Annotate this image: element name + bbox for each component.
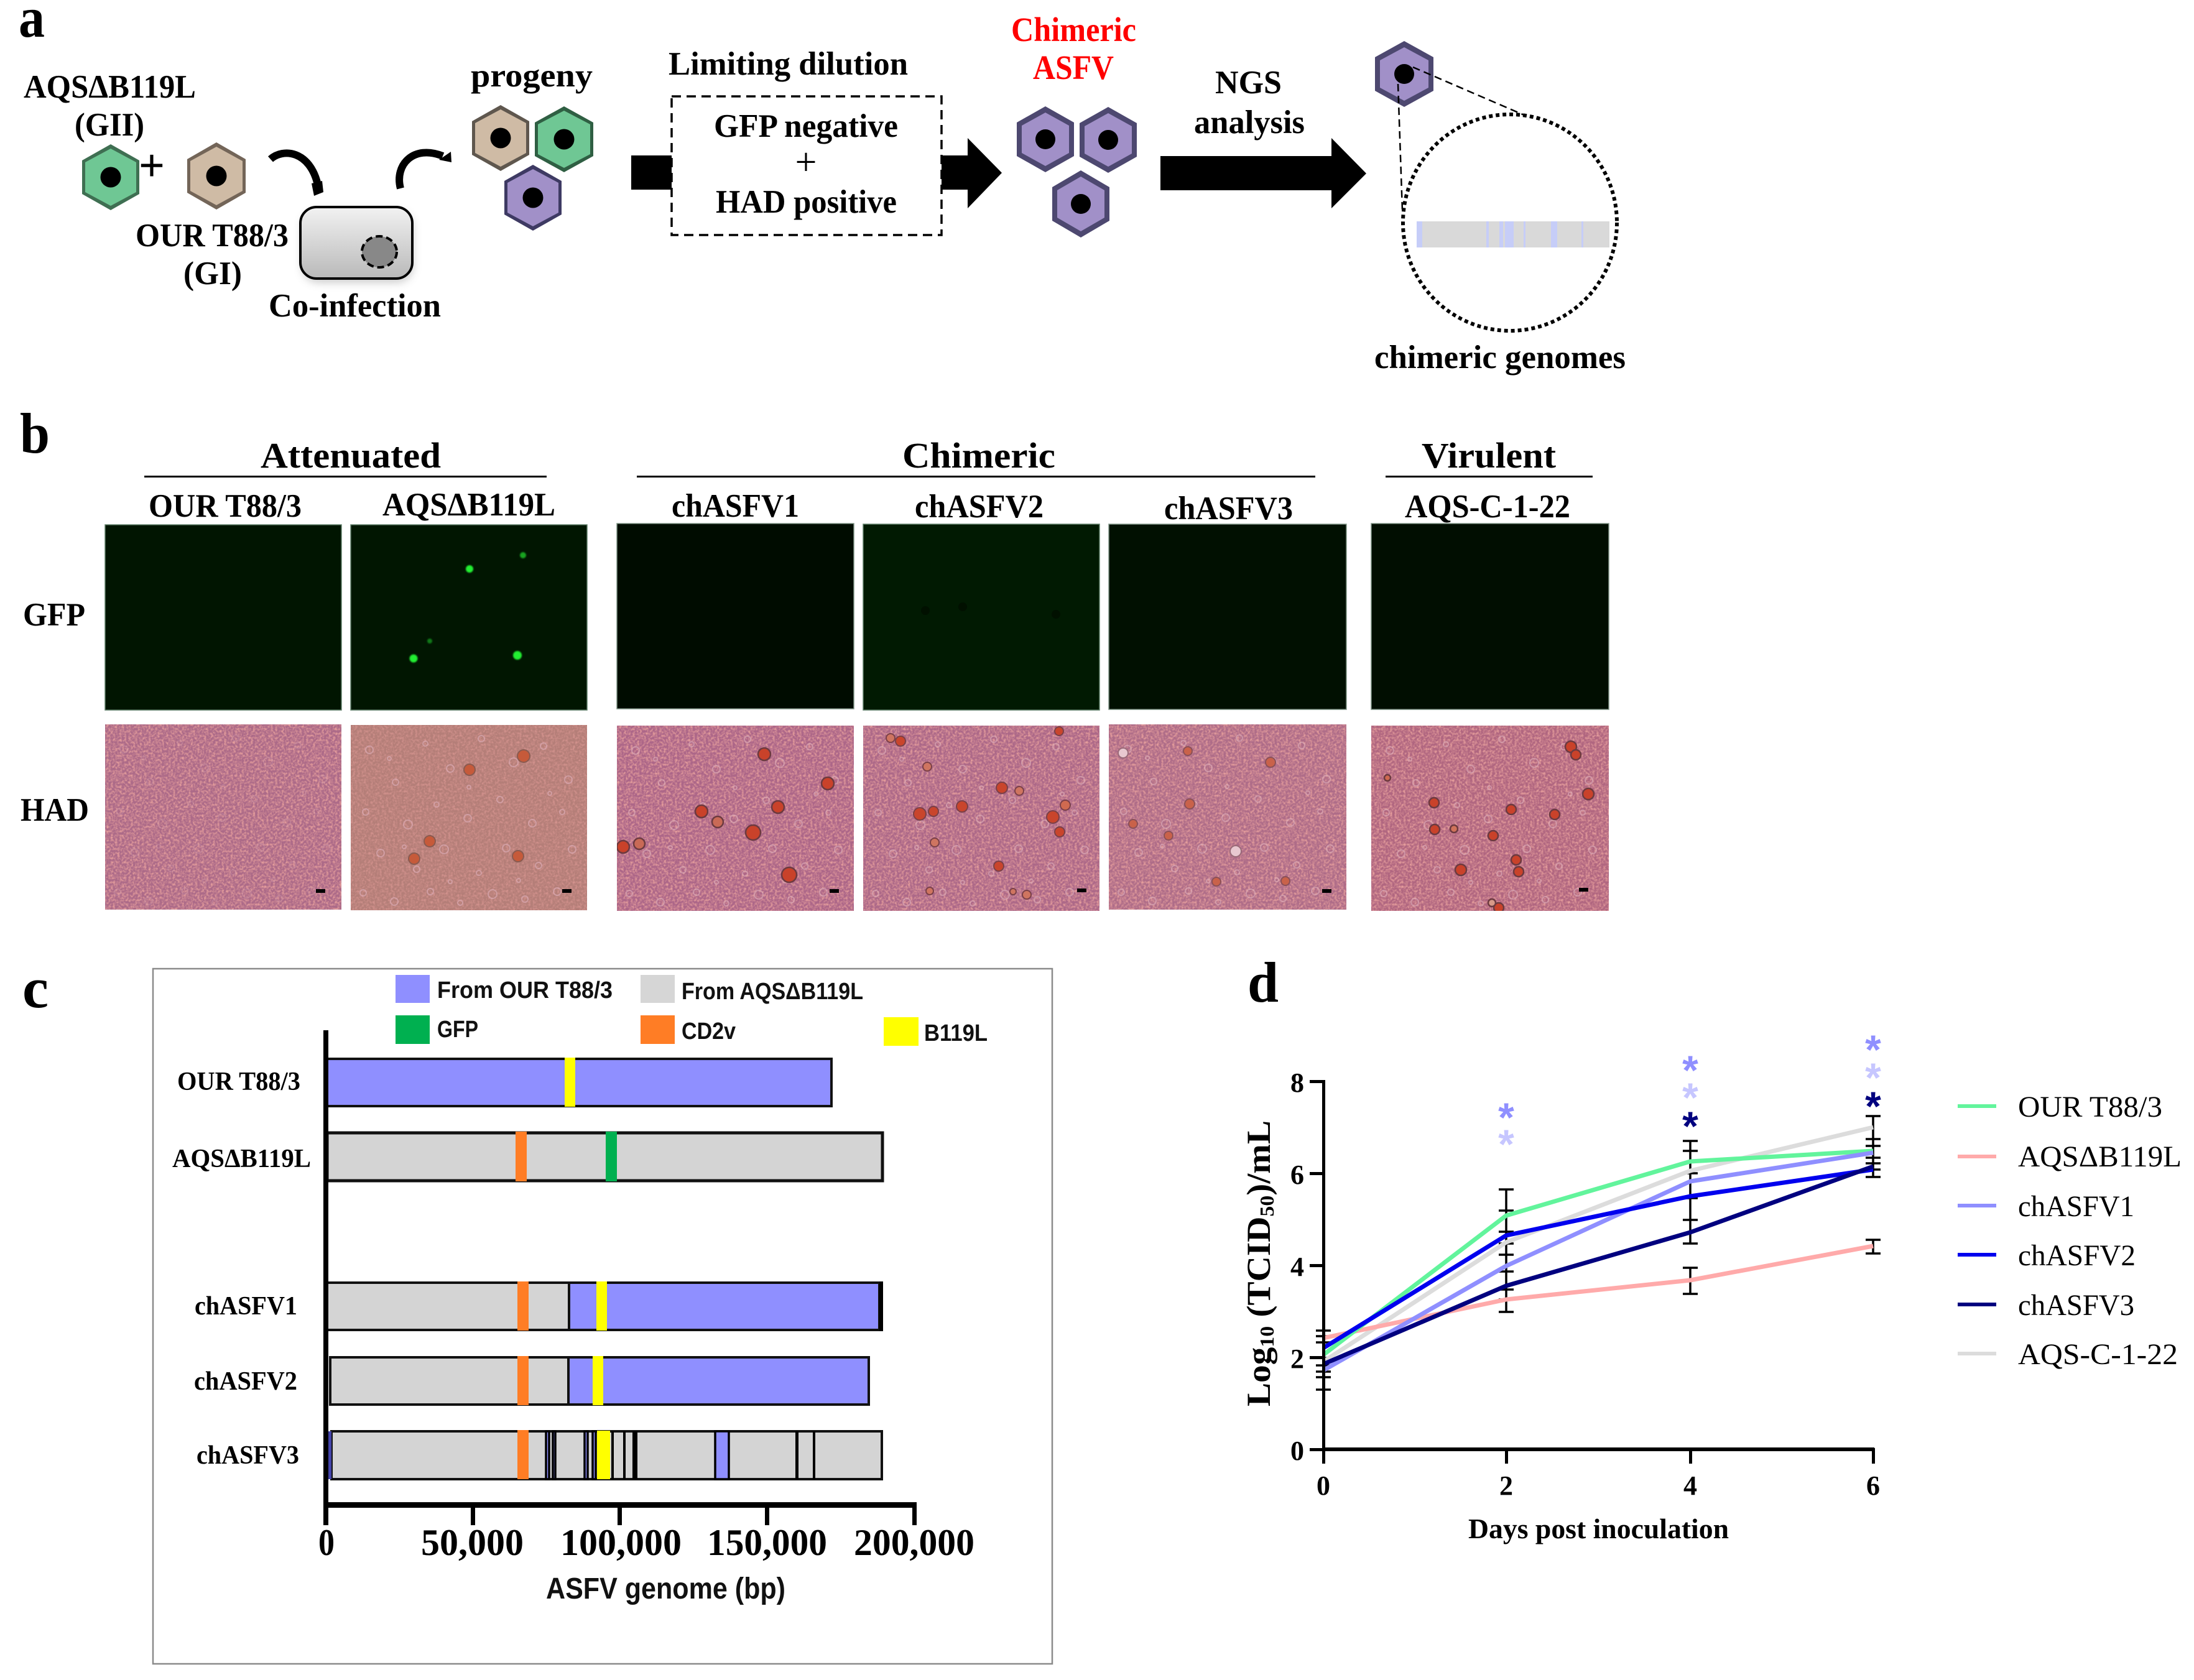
row label: HAD: HAD — [21, 792, 89, 828]
arrow: to chimeric ASFV — [942, 138, 1002, 208]
dashed zoom lines — [1398, 67, 1525, 211]
column labels: chASFV1 — [672, 488, 799, 524]
panel label b: b — [20, 402, 50, 465]
label: OUR T88/3 (GI): (GI) — [183, 256, 242, 292]
x and y axes — [323, 1030, 917, 1525]
column labels: chASFV2 — [915, 489, 1044, 525]
legend: AQSΔB119L — [2018, 1140, 2182, 1173]
label: OUR T88/3 (GI) — [136, 218, 289, 292]
GFP image: AQS delta B119L with green foci — [351, 525, 587, 710]
HAD image: chASFV2 — [863, 726, 1099, 911]
panel b: GFP and HAD micrographs — [20, 402, 1609, 913]
legend — [396, 975, 988, 1046]
column labels: AQSΔB119L — [382, 487, 555, 523]
column labels — [149, 487, 1570, 527]
significance asterisks: * — [1682, 1047, 1698, 1093]
y tick labels: 8 — [1290, 1068, 1304, 1098]
label: AQS delta B119L (GII) — [24, 69, 196, 143]
y-axis title: )/mL — [1240, 1120, 1277, 1196]
label: AQS delta B119L (GII): AQSΔB119L — [24, 69, 196, 105]
label: NGS analysis: NGS — [1215, 65, 1282, 101]
label: Chimeric ASFV: Chimeric — [1011, 11, 1136, 48]
x-axis tick labels: 100,000 — [560, 1522, 682, 1563]
group header: Attenuated: Attenuated — [261, 435, 441, 476]
HAD image: OUR T88/3 — [105, 724, 341, 910]
panel c: genome map — [22, 956, 1052, 1664]
HAD image: AQS-C-1-22 — [1371, 726, 1609, 911]
group header: Chimeric — [637, 435, 1315, 478]
label: Limiting dilution: Limiting dilution — [669, 46, 908, 82]
row labels — [172, 1068, 311, 1470]
plus sign: + — [139, 141, 165, 192]
significance asterisks: * — [1682, 1074, 1698, 1120]
y tick labels: 6 — [1290, 1160, 1304, 1190]
group header: Chimeric: Chimeric — [902, 435, 1055, 476]
icon: green virus hexagon — [82, 144, 139, 210]
arrow: to chimeric genomes — [1160, 138, 1366, 208]
group header: Attenuated — [144, 435, 547, 478]
x tick labels: 4 — [1683, 1470, 1697, 1501]
dashed selection box — [672, 96, 942, 235]
line: OUR T88/3 — [1323, 1151, 1873, 1355]
column labels: chASFV3 — [1164, 491, 1293, 527]
label: Chimeric ASFV — [1011, 11, 1136, 86]
row labels: OUR T88/3 — [177, 1068, 300, 1096]
icon: progeny hexagons — [472, 105, 593, 231]
legend: B119L — [924, 1020, 988, 1046]
HAD image: chASFV3 — [1109, 724, 1346, 910]
significance asterisks: * — [1682, 1103, 1698, 1149]
legend — [1958, 1091, 2182, 1371]
group header: Virulent — [1386, 435, 1593, 478]
line: chASFV1 — [1323, 1153, 1873, 1370]
y-axis title: 10 — [1256, 1326, 1278, 1347]
row labels: AQSΔB119L — [172, 1145, 311, 1173]
dashed selection box: GFP negative — [714, 108, 898, 144]
panel d: growth curves — [1240, 951, 2182, 1544]
legend: chASFV2 — [2018, 1239, 2136, 1272]
GFP image: chASFV3 — [1109, 524, 1346, 709]
label: NGS analysis — [1194, 65, 1305, 141]
icon: chimeric ASFV hexagons — [1017, 106, 1137, 238]
y-axis title: Log — [1240, 1350, 1277, 1406]
x tick labels — [1317, 1470, 1880, 1501]
line: AQS-C-1-22 — [1323, 1127, 1873, 1362]
x-axis tick labels: 200,000 — [854, 1522, 974, 1563]
legend: CD2v — [682, 1018, 736, 1045]
bar: AQS delta B119L genome — [327, 1132, 882, 1181]
line: AQS delta B119L — [1323, 1246, 1873, 1338]
group header: Virulent: Virulent — [1422, 435, 1557, 476]
series lines — [1323, 1127, 1873, 1370]
x-axis tick labels: 150,000 — [707, 1522, 827, 1563]
x-axis tick labels: 0 — [318, 1522, 335, 1563]
x tick labels: 0 — [1317, 1470, 1330, 1501]
legend: GFP — [437, 1017, 478, 1043]
label: progeny: progeny — [471, 58, 593, 94]
HAD image: AQS delta B119L — [351, 725, 587, 910]
significance asterisks: * — [1498, 1121, 1514, 1167]
line: chASFV3 — [1323, 1166, 1873, 1364]
GFP image: chASFV2 — [863, 524, 1099, 710]
column labels: AQS-C-1-22 — [1405, 489, 1570, 525]
bar: chASFV2 genome — [330, 1356, 869, 1405]
icon: tan virus hexagon — [187, 142, 246, 210]
bar: chASFV1 genome — [327, 1281, 883, 1331]
legend: From AQSΔB119L — [682, 979, 863, 1005]
genome panel frame — [153, 969, 1052, 1664]
bar: chASFV3 genome — [328, 1430, 882, 1479]
dashed selection box: HAD positive — [716, 184, 897, 220]
arrow stub into dilution box — [631, 155, 672, 190]
y tick labels — [1290, 1068, 1304, 1466]
icon: co-infection culture dish — [300, 207, 413, 282]
significance asterisks: * — [1498, 1094, 1514, 1140]
legend: AQS-C-1-22 — [2018, 1338, 2178, 1371]
arrow: curved into co-infection — [271, 153, 323, 196]
row labels: chASFV1 — [195, 1292, 297, 1321]
x-axis tick labels — [318, 1522, 974, 1563]
column labels: OUR T88/3 — [149, 488, 302, 524]
GFP image: AQS-C-1-22 — [1371, 524, 1609, 709]
HAD image: chASFV1 — [617, 726, 854, 911]
x tick labels: 2 — [1499, 1470, 1513, 1501]
y-axis title: (TCID — [1240, 1217, 1277, 1326]
arrow: curved out to progeny — [399, 152, 451, 188]
dotted zoom circle — [1403, 114, 1617, 331]
dashed selection box: + — [795, 141, 817, 183]
row labels: chASFV3 — [197, 1441, 299, 1470]
bar: OUR T88/3 genome — [327, 1058, 831, 1107]
y-axis title: 50 — [1256, 1196, 1278, 1217]
label: chimeric genomes: chimeric genomes — [1374, 339, 1626, 376]
label: Co-infection: Co-infection — [269, 288, 441, 324]
y tick labels: 2 — [1290, 1344, 1304, 1374]
legend: chASFV3 — [2018, 1289, 2134, 1322]
GFP image: OUR T88/3 — [105, 525, 341, 710]
panel label d: d — [1247, 951, 1279, 1014]
significance asterisks: * — [1865, 1027, 1881, 1073]
legend: From OUR T88/3 — [437, 977, 613, 1004]
panel a: experimental workflow — [19, 0, 1626, 376]
legend: OUR T88/3 — [2018, 1091, 2162, 1124]
line: chASFV2 — [1323, 1170, 1873, 1348]
y tick labels: 0 — [1290, 1436, 1304, 1466]
chimeric genome bar — [1417, 221, 1609, 247]
error bars — [1316, 1116, 1881, 1390]
label: OUR T88/3 (GI): OUR T88/3 — [136, 218, 289, 254]
panel label c: c — [22, 956, 49, 1020]
label: NGS analysis: analysis — [1194, 104, 1305, 141]
x tick labels: 6 — [1866, 1470, 1880, 1501]
icon: single chimeric hexagon — [1375, 41, 1433, 107]
significance asterisks — [1498, 1027, 1881, 1167]
label: Chimeric ASFV: ASFV — [1033, 48, 1114, 86]
significance asterisks: * — [1865, 1083, 1881, 1129]
significance asterisks: * — [1865, 1055, 1881, 1101]
y tick labels: 4 — [1290, 1252, 1304, 1282]
legend: chASFV1 — [2018, 1190, 2134, 1223]
x-axis tick labels: 50,000 — [421, 1522, 524, 1563]
GFP image: chASFV1 — [617, 524, 854, 709]
x-axis title: ASFV genome (bp) — [546, 1572, 785, 1605]
row label: GFP: GFP — [23, 597, 85, 633]
x-axis title: Days post inoculation — [1468, 1513, 1729, 1544]
label: AQS delta B119L (GII): (GII) — [75, 107, 144, 143]
row labels: chASFV2 — [194, 1367, 297, 1396]
axes — [1310, 1080, 1875, 1464]
